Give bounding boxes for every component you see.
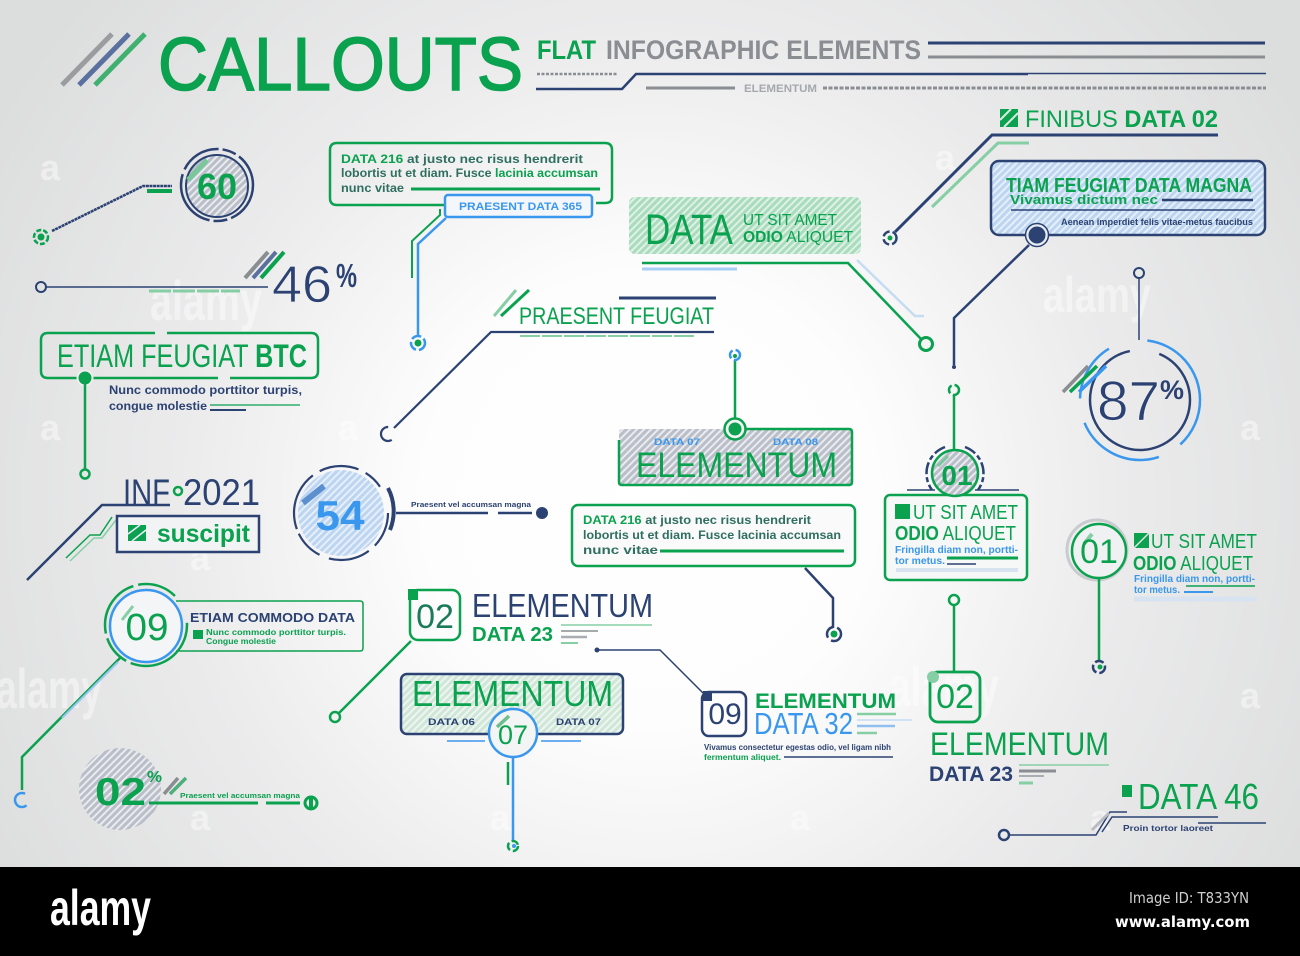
callout: Tiam Feugiat [952,161,1265,369]
top node and line [949,595,959,605]
node [411,336,425,350]
rules [1019,764,1109,766]
heading: ELEMENTUM [636,446,837,485]
icon: slashes [245,252,284,278]
node [34,230,48,244]
icon [128,525,146,541]
line [46,286,268,288]
watermarks: a [1090,797,1111,838]
callout: 54 [294,466,548,560]
icon [408,589,418,600]
callout: 01 right: ODIO ALIQUET [1133,553,1253,575]
watermarks: a [338,407,359,448]
callout: 02 percent: 02 [95,771,146,814]
watermarks [0,137,1261,838]
icon [895,504,910,519]
callout: 60: 60 [197,166,237,207]
callout: 02 Elementum left: DATA 23 [472,624,553,646]
text: DATA 216 at justo nec risus hendrerit [583,513,811,527]
box [41,333,318,378]
number: 09 [708,698,742,731]
node and line [734,360,736,429]
callout: 09 Etiam commodo: 09 [126,607,168,649]
watermarks: a [1240,675,1261,716]
tag text: suscipit [157,520,251,548]
header rules [536,43,1266,89]
line [149,802,300,804]
callout: Etiam Feugiat BTC [41,333,318,478]
icon: title slashes [62,34,145,85]
leader [22,658,120,790]
callout: Elementum bottom panel [401,673,623,851]
callout: Data 216 middle: nunc vitae [583,543,658,557]
callout: 09 Elementum Data 32: DATA 32 [754,706,853,741]
callout: Etiam Feugiat BTC: congue molestie [109,399,207,413]
icon [1122,785,1132,797]
value: 87 [1097,369,1160,432]
text: UT SIT AMET [913,502,1018,524]
callout: Data ut sit amet: ODIO ALIQUET [743,229,853,246]
leader [339,641,411,713]
caption: Praesent vel accumsan magna [180,791,301,800]
callout: 01 box: Fringilla diam non, portti- [895,544,1018,556]
box [401,674,623,734]
callout: 54: 54 [316,492,365,539]
callout: 60 [34,149,253,244]
node [884,232,896,244]
heading: ELEMENTUM [755,690,896,713]
icon [193,630,203,639]
heading: TIAM FEUGIAT DATA MAGNA [1006,175,1252,197]
watermarks: a [935,137,956,178]
callout: 02 Elementum right: DATA 23 [929,763,1013,786]
number: 02 [416,598,454,636]
box [629,197,861,254]
heading: ETIAM FEUGIAT BTC [57,338,307,374]
box [702,692,746,736]
leader [597,650,704,694]
text: DATA 216 at justo nec risus hendrerit [341,152,583,166]
tag [445,195,592,217]
blue rules [447,740,581,742]
leader [27,505,170,580]
badge [186,155,248,217]
callout: Data 216 top: PRAESENT DATA 365 [459,201,582,213]
icon [1134,533,1149,548]
callout: 87 percent [1063,268,1200,460]
callout: Data 46 [999,776,1266,840]
heading: PRAESENT FEUGIAT [519,303,714,330]
image id: Image ID: T833YN [1129,889,1249,907]
number: 02 [936,678,974,716]
badge [79,748,161,830]
watermarks: a [490,537,511,578]
box [176,601,363,651]
leader [805,568,833,628]
callout: Elementum panel: DATA 08 [773,437,818,447]
callout: 46 percent [36,252,357,314]
callout: 01 right [1067,520,1257,673]
callout: 09 Elementum Data 32 [594,648,912,762]
callout: 01 right: Fringilla diam non, portti- [1134,573,1255,585]
leader [412,209,440,278]
leader [895,135,1218,232]
labels: INF [123,472,170,513]
callout: Elementum bottom panel: DATA 07 [556,717,601,728]
callout: Praesent Feugiat [381,290,716,441]
watermarks: alamy [0,657,102,720]
rule [907,489,1019,491]
callout: 01 box: ODIO ALIQUET [895,523,1016,545]
callout: 01 right: 01 [1080,533,1118,571]
callout: 02 percent [79,748,317,830]
callout: 01 right: tor metus. [1134,584,1180,596]
callout: Elementum bottom panel: 07 [498,720,528,750]
callout: Inf 2021: 2021 [183,472,260,513]
callout: Data 216 middle: lobortis ut et diam. Fusce lacinia accumsan [583,528,841,542]
callout: 46 percent: % [336,257,357,294]
text: UT SIT AMET [1151,531,1257,553]
heading: ELEMENTUM [472,587,653,624]
watermarks: a [40,147,61,188]
badge [1067,520,1127,580]
badge [932,450,978,496]
leader [642,263,921,339]
watermarks: alamy [1043,267,1151,323]
caption: Proin tortor laoreet [1123,823,1213,833]
callout: Data 216 top: lobortis ut et diam. Fusce lacinia accumsan [341,166,598,180]
callout: Inf 2021 [27,472,260,580]
node [920,338,932,350]
subtitle: infographic elements: INFOGRAPHIC ELEMENTS [606,35,921,65]
leader [1098,578,1100,660]
node and line [78,370,92,386]
heading: ELEMENTUM [930,726,1109,762]
node [381,427,395,441]
heading: FINIBUS DATA 02 [1025,106,1218,133]
callout: 02 Elementum left [330,587,653,722]
footer logo: alamy [50,880,151,936]
top line and node [953,395,955,450]
text: Nunc commodo porttitor turpis. [206,627,346,637]
heading: ETIAM COMMODO DATA [190,610,356,625]
website: www.alamy.com [1115,913,1250,931]
value: 46 [272,256,332,314]
callout: 02 percent: % [147,769,162,786]
watermarks: a [40,407,61,448]
watermarks: a [190,797,211,838]
big label: DATA [645,206,733,254]
icon: slashes [1063,366,1106,392]
icon: slashes [164,778,186,794]
icon [1000,109,1018,127]
line [396,512,532,514]
callout: 01 box: 01 [941,460,973,491]
callout: Data 216 middle [572,505,855,641]
heading: callouts: CALLOUTS [158,22,523,106]
box [619,429,852,485]
leader [394,332,714,428]
title block [62,22,1266,106]
watermarks: a [790,797,811,838]
badge [298,470,384,556]
callout: 09 Elementum Data 32: fermentum aliquet. [704,752,781,762]
watermarks: a [490,797,511,838]
callout: 87 percent: % [1160,375,1184,405]
small labels: DATA 07 [654,437,700,447]
node [827,627,841,641]
callout: 09 Etiam commodo [15,584,363,807]
watermarks: alamy [889,655,999,718]
callout: Tiam Feugiat: Aenean imperdiet felis vitae-metus faucibus [1061,217,1253,227]
top node [1138,278,1140,340]
callout: Elementum panel [619,350,852,485]
caption: Vivamus consectetur egestas odio, vel ligam nibh [704,742,891,752]
callout: Data 216 top [330,143,612,350]
leader [1010,812,1127,835]
small label: ELEMENTUM [744,83,817,95]
watermarks: alamy [150,269,262,332]
rules [857,713,896,715]
leader [512,757,514,841]
tag box [117,516,259,552]
watermarks: a [1240,407,1261,448]
caption: Nunc commodo porttitor turpis, [109,383,302,397]
node [15,793,29,807]
box [572,505,855,566]
labels: UT SIT AMET [743,212,837,229]
rings [1090,350,1190,450]
callout: 01 box: tor metus. [895,555,945,567]
box [885,495,1027,580]
box [991,161,1265,235]
text: Vivamus dictum nec [1010,192,1158,207]
node [305,797,317,809]
icon: slashes [494,290,529,316]
box [330,143,612,205]
callout: 02 Elementum right [927,595,1109,786]
caption: Praesent vel accumsan magna [411,500,532,509]
subtitle: flat: FLAT [537,35,596,65]
callout: 09 Etiam commodo: Congue molestie [206,636,276,646]
rules [561,624,652,626]
footer bar [0,867,1300,956]
badge [489,709,537,757]
heading: DATA 46 [1138,776,1259,817]
box [410,590,460,640]
callout: Data ut sit amet [629,197,932,350]
heading: ELEMENTUM [412,673,613,714]
leader line [52,186,172,231]
badge [105,584,187,666]
callout: Data 216 top: nunc vitae [341,181,404,195]
node and leader [1027,225,1047,245]
watermarks: a [190,537,211,578]
callout: 01 box [885,385,1027,580]
callout: Finibus Data 02 [884,106,1218,244]
box [930,672,980,722]
small labels: DATA 06 [428,717,475,728]
